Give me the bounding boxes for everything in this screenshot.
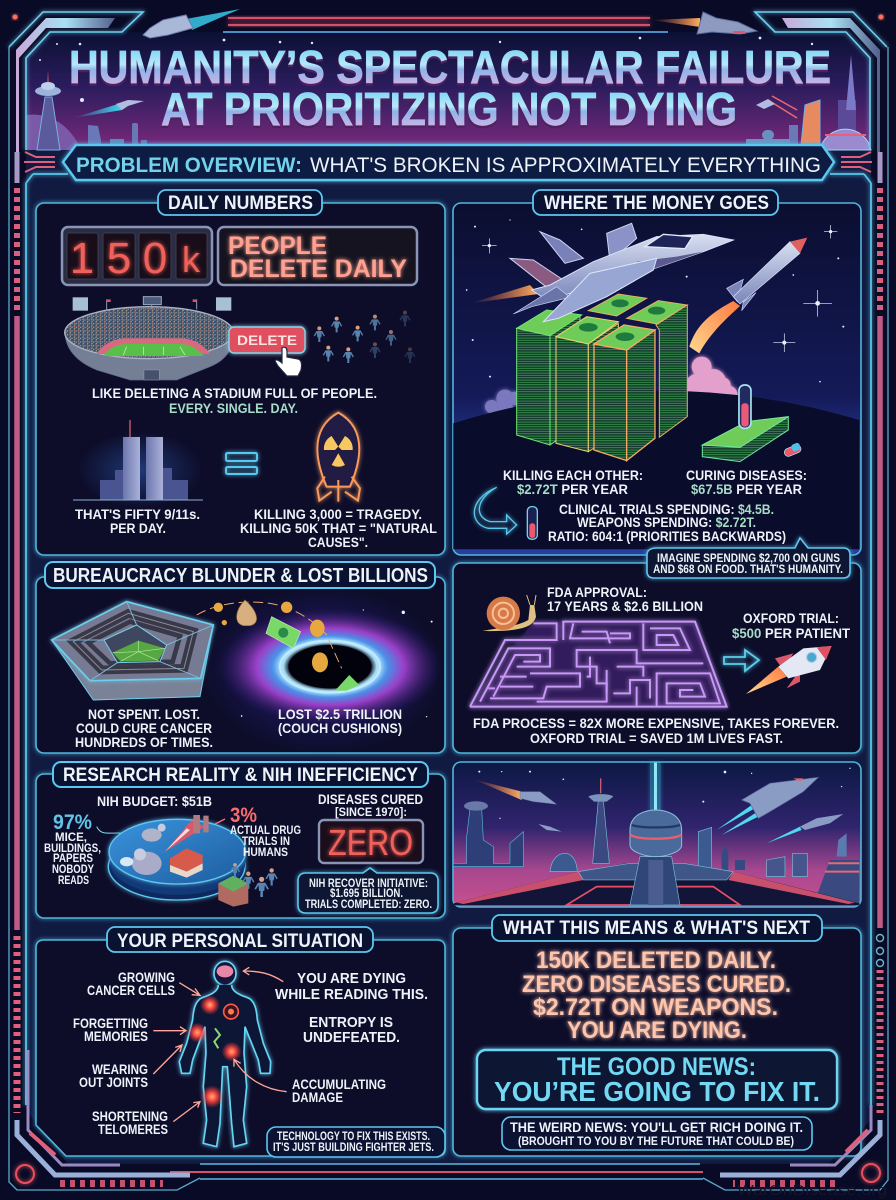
labels: left <box>73 970 175 1137</box>
labels: left: GROWING <box>118 970 175 985</box>
text: stadium comparison: EVERY. SINGLE. DAY. <box>169 401 298 416</box>
red connectors <box>24 152 872 172</box>
ship: small right <box>767 827 802 843</box>
counter 150k: 1 <box>70 234 94 283</box>
heading: daily numbers: DAILY NUMBERS <box>168 193 313 214</box>
counter 150k: 5 <box>107 234 131 283</box>
icon: twin towers <box>73 420 203 508</box>
panel: research reality <box>36 762 445 918</box>
text: summary list <box>522 947 791 1044</box>
button: delete <box>229 327 305 353</box>
callout: spending analogy: AND $68 ON FOOD. THAT'S HUMANITY. <box>653 564 843 576</box>
stars <box>478 768 851 819</box>
subheader banner: WHAT'S BROKEN IS APPROXIMATELY EVERYTHING <box>310 154 821 177</box>
text: FDA process comparison: FDA PROCESS = 82X MORE EXPENSIVE, TAKES FOREVER. <box>473 716 839 731</box>
text: lost trillions <box>278 707 402 736</box>
labels: left: FORGETTING <box>73 1016 148 1031</box>
icon: pentagon <box>52 602 213 700</box>
missile <box>727 279 756 311</box>
callout: NIH recover initiative: TRIALS COMPLETED: ZERO. <box>305 899 432 911</box>
header panel <box>26 32 870 150</box>
text: stadium comparison: LIKE DELETING A STADIUM FULL OF PEOPLE. <box>92 386 377 401</box>
ship: big right <box>717 805 758 835</box>
callout: NIH recover initiative: $1.695 BILLION. <box>330 888 403 900</box>
watermark: WarOnDisease.org <box>737 1182 887 1199</box>
counter 150k: 0 <box>143 234 167 283</box>
text: 97 percent: PAPERS <box>53 853 93 865</box>
text: killing each other: $2.72T PER YEAR <box>517 482 628 497</box>
callout: spending analogy: IMAGINE SPENDING $2,700 ON GUNS <box>657 553 840 565</box>
text: not spent lost <box>75 707 213 750</box>
icon: humans with books <box>218 863 277 907</box>
text: stadium comparison <box>92 386 377 416</box>
panel: what this means <box>453 915 861 1156</box>
line and 3 percent: HUMANS <box>243 847 288 859</box>
icon: rocket <box>746 646 832 694</box>
text: 97 percent: 97% <box>53 811 92 834</box>
light beam <box>650 763 661 813</box>
mice <box>142 828 162 842</box>
text: entropy: ENTROPY IS <box>309 1014 393 1031</box>
text: lost trillions: LOST $2.5 TRILLION <box>278 707 402 722</box>
text: curing diseases <box>686 468 807 497</box>
labels: left: OUT JOINTS <box>79 1075 148 1090</box>
books <box>170 848 203 872</box>
money stack 2 <box>556 337 588 452</box>
icon: maze <box>470 622 727 707</box>
subheader banner <box>63 145 834 180</box>
text: killing each other: KILLING EACH OTHER: <box>503 468 643 483</box>
small test tube <box>527 507 537 539</box>
bottom frame decoration <box>16 1050 880 1187</box>
text: summary list: $2.72T ON WEAPONS. <box>533 994 778 1021</box>
labels: left: MEMORIES <box>84 1029 148 1044</box>
callout: the good news: THE GOOD NEWS: <box>557 1053 756 1081</box>
text: 97 percent <box>44 811 101 887</box>
icon: stadium <box>65 297 234 380</box>
icon: equals <box>226 453 257 474</box>
header stars <box>39 37 813 102</box>
ship: flame left <box>473 779 522 800</box>
text: clinical trials ratio: CLINICAL TRIALS SPENDING: $4.5B. <box>559 502 774 517</box>
text: you are dying: WHILE READING THIS. <box>275 986 428 1003</box>
header city left <box>27 70 147 150</box>
text: FDA process comparison <box>473 716 839 746</box>
icon: hand cursor <box>275 347 302 376</box>
callout: spending analogy <box>647 538 850 578</box>
text: FDA process comparison: OXFORD TRIAL = SAVED 1M LIVES FAST. <box>530 731 783 746</box>
spaceship right <box>651 12 757 34</box>
callout: the good news: YOU’RE GOING TO FIX IT. <box>494 1076 820 1107</box>
text: FDA approval: FDA APPROVAL: <box>547 585 647 600</box>
pie chart: NIH budget <box>97 815 246 900</box>
text: diseases cured: [SINCE 1970]: <box>335 805 407 819</box>
text: 97 percent: BUILDINGS, <box>44 843 101 855</box>
text: tragedy vs natural causes: KILLING 3,000 = TRAGEDY. <box>254 507 422 522</box>
heading: what this means: WHAT THIS MEANS & WHAT'S NEXT <box>503 918 810 939</box>
label: people delete daily: PEOPLE <box>228 232 327 260</box>
text: summary list: 150K DELETED DAILY. <box>536 947 776 974</box>
text: Oxford trial <box>732 611 851 641</box>
money stack 1 <box>517 328 550 445</box>
text: clinical trials ratio: WEAPONS SPENDING: $2.72T. <box>577 515 756 530</box>
text: entropy <box>303 1014 400 1046</box>
callout: the good news <box>477 1050 837 1109</box>
callout: the weird news: THE WEIRD NEWS: YOU'LL GET RICH DOING IT. <box>510 1120 803 1135</box>
text: fifty 9/11s: PER DAY. <box>110 521 166 536</box>
text: Oxford trial: OXFORD TRIAL: <box>743 611 839 626</box>
callout: technology: IT'S JUST BUILDING FIGHTER JETS. <box>273 1142 434 1154</box>
heading: bureaucracy: BUREAUCRACY BLUNDER & LOST BILLIONS <box>53 565 428 587</box>
counter 150k: k <box>182 239 201 280</box>
title: AT PRIORITIZING NOT DYING <box>161 83 737 135</box>
text: tragedy vs natural causes: CAUSES". <box>308 535 368 550</box>
text: NIH budget: NIH BUDGET: $51B <box>97 794 212 809</box>
text: tragedy vs natural causes <box>240 507 437 550</box>
text: clinical trials ratio <box>548 502 786 544</box>
subheader banner: PROBLEM OVERVIEW: <box>76 154 302 177</box>
right skyline <box>698 827 712 870</box>
text: fifty 9/11s: THAT'S FIFTY 9/11s. <box>75 507 200 522</box>
labels: left: TELOMERES <box>98 1122 168 1137</box>
icon: neon body <box>179 961 271 1147</box>
left skyline <box>453 808 523 867</box>
panel: bureaucracy blunder <box>36 562 445 753</box>
frame interior <box>26 150 871 1164</box>
text: FDA approval <box>547 585 703 614</box>
counter 150k <box>62 227 212 285</box>
callout: the weird news <box>502 1117 812 1150</box>
icon: arrow <box>724 650 759 671</box>
labels: left: SHORTENING <box>92 1109 168 1124</box>
text: 97 percent: MICE, <box>55 832 87 844</box>
galaxy background <box>203 587 443 753</box>
text: accumulating damage: ACCUMULATING <box>292 1077 386 1092</box>
text: 97 percent: NOBODY <box>52 864 94 876</box>
callout: NIH recover initiative <box>298 868 438 913</box>
space illustration <box>453 219 859 549</box>
icon: nuclear bomb <box>317 413 360 502</box>
label: people delete daily: DELETE DAILY <box>230 255 407 283</box>
small money + test tube <box>702 417 788 462</box>
text: summary list: ZERO DISEASES CURED. <box>522 971 791 998</box>
top neon lines <box>223 12 668 32</box>
button: delete: DELETE <box>237 332 297 348</box>
text: accumulating damage: DAMAGE <box>292 1090 343 1105</box>
labels: left: WEARING <box>92 1062 148 1077</box>
text: killing each other <box>503 468 643 497</box>
spaceship left <box>143 9 240 38</box>
callout: the weird news: (BROUGHT TO YOU BY THE FUTURE THAT COULD BE) <box>518 1136 794 1148</box>
curved arrow <box>474 487 517 534</box>
text: not spent lost: COULD CURE CANCER <box>76 721 212 736</box>
text: lost trillions: (COUCH CUSHIONS) <box>278 721 402 736</box>
line and 3 percent: 3% <box>230 804 257 827</box>
small ship <box>538 824 562 832</box>
text: FDA approval: 17 YEARS & $2.6 BILLION <box>547 599 703 614</box>
outer frame brackets <box>9 12 887 152</box>
platform <box>454 863 859 905</box>
back money stacks <box>588 294 647 316</box>
heading: where the money goes: WHERE THE MONEY GOES <box>544 193 769 214</box>
text: you are dying <box>275 970 428 1003</box>
label: people delete daily <box>218 227 417 285</box>
icon: snail <box>482 595 536 631</box>
panel: where the money goes <box>453 190 861 555</box>
rail circles <box>876 934 884 966</box>
money stack 3 <box>594 344 627 461</box>
callout: technology <box>267 1127 445 1157</box>
text: clinical trials ratio: RATIO: 604:1 (PRIORITIES BACKWARDS) <box>548 529 786 544</box>
title <box>69 41 831 137</box>
panel: your personal situation <box>36 927 445 1157</box>
text: not spent lost: NOT SPENT. LOST. <box>88 707 200 722</box>
text: Oxford trial: $500 PER PATIENT <box>732 626 851 641</box>
counter: zero: ZERO <box>328 822 413 863</box>
text: fifty 9/11s <box>75 507 200 536</box>
line and 3 percent: ACTUAL DRUG <box>230 825 301 837</box>
panel: daily numbers <box>36 190 445 555</box>
line and 3 percent <box>215 804 301 859</box>
line and 3 percent: TRIALS IN <box>242 836 290 848</box>
arrows to body <box>153 967 287 1122</box>
labels: left: CANCER CELLS <box>87 983 175 998</box>
text: summary list: YOU ARE DYING. <box>567 1017 747 1044</box>
central tower <box>630 857 680 905</box>
text: diseases cured <box>318 792 423 819</box>
text: entropy: UNDEFEATED. <box>303 1029 400 1046</box>
callout: NIH recover initiative: NIH RECOVER INITIATIVE: <box>309 878 428 890</box>
text: curing diseases: $67.5B PER YEAR <box>691 482 802 497</box>
text: you are dying: YOU ARE DYING <box>297 970 406 987</box>
title: AT PRIORITIZING NOT DYING <box>161 85 737 137</box>
small humans <box>193 815 209 833</box>
text: not spent lost: HUNDREDS OF TIMES. <box>75 735 213 750</box>
text: curing diseases: CURING DISEASES: <box>686 468 807 483</box>
panel: future city <box>453 762 861 907</box>
icon: fading people <box>314 311 415 363</box>
panel: FDA versus Oxford <box>453 563 861 753</box>
text: accumulating damage <box>292 1077 386 1105</box>
icon: money flying into black hole <box>197 600 359 691</box>
header city right <box>746 55 871 150</box>
callout: technology: TECHNOLOGY TO FIX THIS EXISTS. <box>277 1131 430 1143</box>
heading: research: RESEARCH REALITY & NIH INEFFICIENCY <box>63 765 418 786</box>
text: diseases cured: DISEASES CURED <box>318 792 423 807</box>
heading: personal: YOUR PERSONAL SITUATION <box>117 931 363 952</box>
text: 97 percent: READS <box>58 875 89 887</box>
jet <box>470 285 538 303</box>
text: tragedy vs natural causes: KILLING 50K THAT = "NATURAL <box>240 521 437 536</box>
